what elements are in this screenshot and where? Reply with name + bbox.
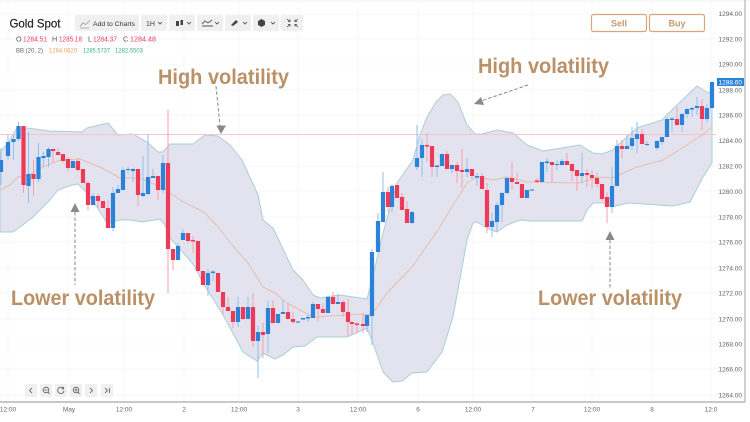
reference price line — [0, 134, 716, 136]
x axis labels: 12:00 — [350, 406, 367, 414]
y axis labels: 1276.00 — [718, 240, 742, 246]
y axis labels: 1266.00 — [718, 366, 742, 374]
candlesticks — [1, 82, 712, 378]
y axis labels: 1288.00 — [718, 88, 742, 94]
x axis labels: 12:0 — [705, 406, 718, 414]
y axis labels: 1272.00 — [718, 290, 742, 298]
y axis labels: 1264.00 — [718, 392, 742, 400]
chart title: Gold Spot — [10, 16, 61, 30]
heading: lower volatility right: Lower volatility — [538, 287, 682, 310]
y axis labels: 1292.00 — [718, 36, 742, 44]
heading: lower volatility left: Lower volatility — [11, 287, 155, 310]
OHLC readout: H — [52, 34, 57, 44]
toolbar: 1H — [146, 21, 155, 28]
y axis labels: 1290.00 — [718, 62, 742, 68]
OHLC readout: L — [88, 34, 92, 44]
y axis labels: 1274.00 — [718, 266, 742, 272]
y axis labels: 1268.00 — [718, 342, 742, 348]
x axis labels: 12:00 — [0, 406, 17, 414]
OHLC readout: C — [123, 34, 128, 44]
y axis labels: 1294.00 — [718, 11, 742, 18]
bollinger middle line — [0, 127, 712, 317]
OHLC readout: O — [16, 34, 22, 44]
x axis labels: 6 — [416, 406, 420, 414]
navigation controls — [25, 384, 113, 397]
x axis labels: 8 — [650, 406, 654, 414]
OHLC readout: 1284.48 — [130, 34, 156, 44]
toolbar — [75, 15, 303, 31]
toolbar: Add to Charts — [93, 21, 136, 28]
current price tag: 1288.60 — [718, 80, 742, 86]
x axis labels: May — [63, 406, 76, 414]
buy button — [650, 14, 704, 32]
OHLC readout: 1284.37 — [93, 34, 117, 44]
OHLC readout: 1285.18 — [59, 34, 82, 44]
y axis labels: 1280.00 — [718, 189, 742, 196]
x axis labels: 2 — [182, 406, 186, 414]
x axis labels: 12:00 — [231, 406, 248, 414]
y axis labels: 1282.00 — [718, 164, 742, 170]
y axis labels: 1270.00 — [718, 316, 742, 324]
x axis labels: 3 — [296, 406, 300, 414]
bollinger band envelope — [0, 86, 712, 382]
OHLC readout: 1284.51 — [23, 34, 47, 44]
arrow: to high volatility right — [474, 85, 528, 105]
arrow: to high volatility left — [216, 86, 226, 134]
sell button: Sell — [611, 18, 627, 28]
heading: high volatility left: High volatility — [158, 66, 289, 89]
arrow: to lower volatility left — [70, 203, 80, 285]
x axis labels: 12:00 — [584, 406, 601, 414]
x axis labels: 12:00 — [116, 406, 133, 414]
OHLC readout — [16, 34, 156, 44]
y axis labels: 1284.00 — [718, 138, 742, 145]
bollinger readout: 1284.0620 — [49, 48, 78, 54]
bollinger readout: 1282.5503 — [115, 48, 144, 54]
sell button — [592, 14, 646, 32]
buy button: Buy — [668, 18, 686, 28]
bollinger readout — [16, 48, 144, 54]
arrow: to lower volatility right — [606, 231, 614, 288]
y axis labels: 1278.00 — [718, 214, 742, 222]
y axis labels: 1286.00 — [718, 112, 742, 120]
x axis labels — [0, 406, 718, 414]
heading: high volatility right: High volatility — [478, 55, 609, 78]
x axis labels: 12:00 — [465, 406, 482, 414]
bollinger readout: 1285.5737 — [83, 48, 111, 54]
bollinger readout: BB (20, 2) — [16, 48, 43, 54]
y axis labels — [718, 11, 742, 400]
x axis labels: 7 — [531, 406, 535, 414]
